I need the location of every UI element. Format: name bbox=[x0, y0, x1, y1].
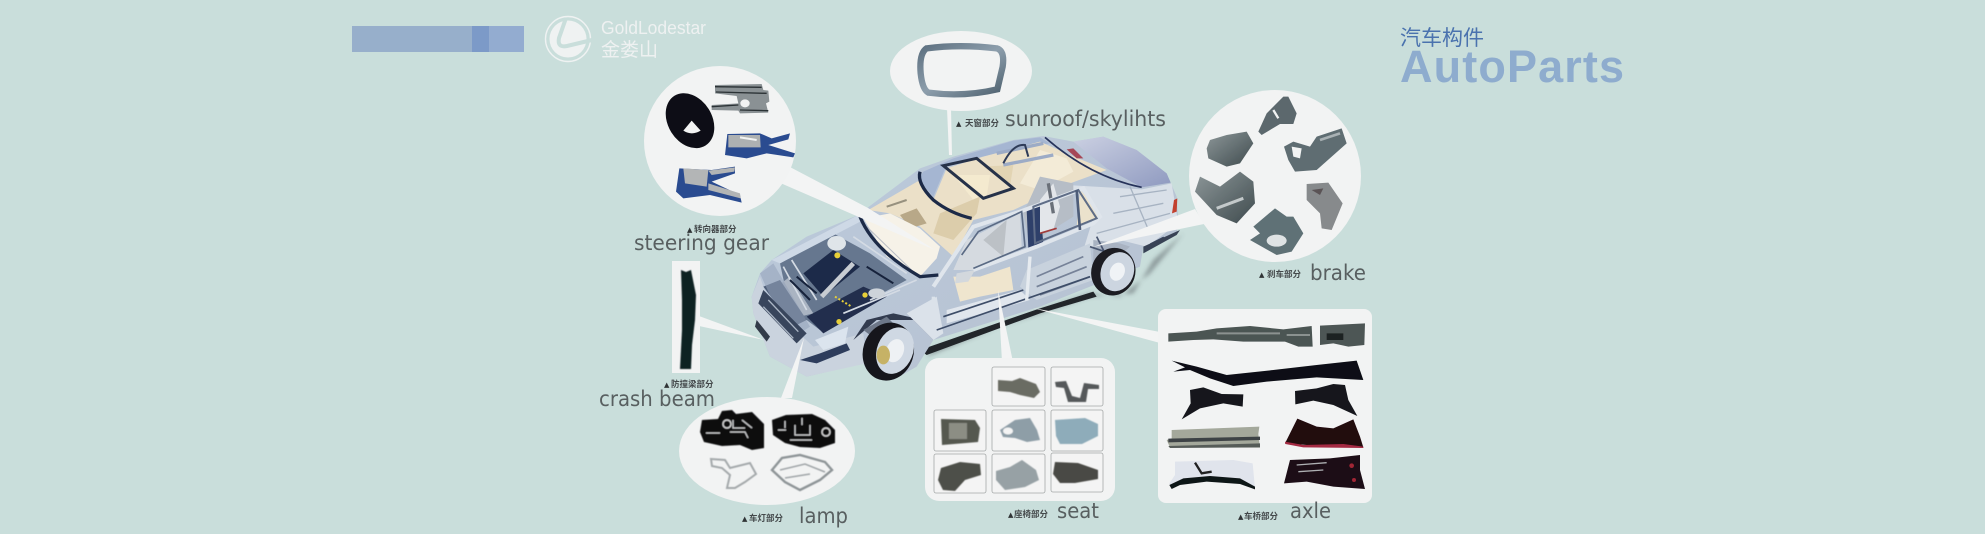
panel: axle bbox=[1158, 309, 1372, 503]
car illustration bbox=[752, 136, 1183, 387]
logo wordmark: GoldLodestar bbox=[601, 18, 706, 38]
axle part: left wing bbox=[1182, 387, 1243, 419]
label: crash beam: crash beam bbox=[599, 387, 715, 411]
pointer: steering gear bbox=[778, 166, 935, 250]
label: seat: seat bbox=[1057, 499, 1099, 523]
label: brake: brake bbox=[1310, 261, 1366, 285]
title bbox=[1400, 27, 1624, 92]
windshield frame bbox=[860, 217, 938, 277]
rear panel bbox=[1067, 183, 1178, 250]
left lower bracket bbox=[1195, 172, 1255, 223]
wheel arch & suspension bbox=[853, 313, 933, 340]
panel: seat bbox=[925, 358, 1115, 501]
windshield bbox=[863, 213, 940, 277]
label: seat bbox=[1008, 499, 1099, 523]
label: sunroof: 天窗部分 bbox=[965, 118, 1000, 128]
bottom bracket bbox=[1250, 208, 1303, 255]
panel: brake bbox=[1189, 90, 1361, 262]
pointer: seat bbox=[998, 290, 1013, 362]
right upper bracket bbox=[1284, 128, 1347, 172]
panel: crash beam bbox=[672, 261, 700, 373]
title English: AutoParts bbox=[1400, 41, 1624, 92]
label: lamp: lamp bbox=[799, 504, 848, 528]
axle part: long rail grey bbox=[1168, 326, 1313, 347]
front bumper bbox=[752, 277, 867, 377]
top bracket bbox=[1258, 97, 1297, 135]
left upper bracket bbox=[1207, 132, 1253, 167]
front wheel bbox=[855, 316, 921, 387]
front seat bbox=[953, 267, 1013, 302]
pointer: sunroof bbox=[947, 108, 952, 155]
seat tiles bbox=[934, 367, 1103, 493]
logo Chinese name: 金娄山 bbox=[601, 39, 658, 61]
interior bbox=[868, 142, 1107, 257]
engine bay bbox=[780, 233, 907, 330]
lamp part 1 bbox=[700, 410, 764, 450]
black ring part bbox=[656, 84, 724, 157]
label: seat: ▲ bbox=[1008, 511, 1014, 519]
rear lower side bbox=[1143, 230, 1180, 253]
seat parts bbox=[938, 378, 1099, 491]
sunroof frame bbox=[943, 158, 1013, 198]
crash beam part bbox=[680, 270, 696, 369]
roof glass bbox=[918, 137, 1050, 197]
label: brake: ▲ bbox=[1259, 271, 1265, 279]
label: brake bbox=[1259, 261, 1366, 285]
label: seat: 座椅部分 bbox=[1014, 509, 1049, 519]
label: lamp: 车灯部分 bbox=[749, 513, 784, 523]
lamp part 2 bbox=[772, 414, 835, 448]
brake light bbox=[1067, 148, 1083, 158]
label: steering gear: 转向器部分 bbox=[694, 224, 737, 234]
axle part: dark maroon bbox=[1284, 455, 1365, 489]
label: lamp bbox=[742, 504, 848, 528]
right lower bracket bbox=[1307, 183, 1343, 230]
label: brake: 刹车部分 bbox=[1267, 269, 1302, 279]
label: axle: axle bbox=[1290, 499, 1331, 523]
hood frame bbox=[772, 215, 863, 263]
panel: steering gear bbox=[644, 66, 796, 216]
pointer: lamp bbox=[781, 338, 804, 398]
label: axle: ▲ bbox=[1238, 513, 1244, 521]
title Chinese: 汽车构件 bbox=[1400, 27, 1484, 50]
rear deck bbox=[1073, 137, 1171, 187]
sunroof frame part bbox=[920, 46, 1003, 94]
car shadow bbox=[927, 233, 1183, 357]
label: axle: 车桥部分 bbox=[1244, 511, 1279, 521]
lamp part 3 bbox=[711, 459, 756, 488]
yellow caps bbox=[834, 252, 840, 258]
rear window line bbox=[1045, 137, 1142, 187]
pointer: axle bbox=[1033, 308, 1160, 343]
axle part: long black rail bbox=[1172, 361, 1363, 386]
bottom fork part bbox=[676, 167, 742, 203]
axle part: small plate bbox=[1320, 323, 1365, 347]
axle part: rail silver bbox=[1167, 427, 1260, 448]
frame strokes bbox=[933, 188, 1100, 287]
label: steering gear: steering gear bbox=[634, 231, 769, 255]
rear wheel bbox=[1085, 242, 1142, 301]
car body bbox=[752, 136, 1178, 380]
top bracket bbox=[712, 84, 769, 113]
axle part: white panel bbox=[1169, 460, 1255, 488]
label: lamp: ▲ bbox=[742, 515, 748, 523]
label: crash beam: 防撞梁部分 bbox=[671, 379, 714, 389]
logo: Gold Lodestar bbox=[546, 16, 706, 62]
label: sunroof: ▲ bbox=[956, 120, 962, 128]
axle part: dark red bbox=[1285, 419, 1363, 447]
fork part bbox=[725, 133, 795, 158]
label: crash beam: ▲ bbox=[664, 381, 670, 389]
pointer: crash beam bbox=[699, 316, 764, 340]
lamp part 4 bbox=[772, 455, 832, 490]
label: steering gear: ▲ bbox=[687, 226, 693, 234]
panel: lamp bbox=[679, 397, 855, 505]
side glass and door area bbox=[953, 213, 1022, 270]
pointer: brake bbox=[1093, 209, 1204, 247]
panel: sunroof bbox=[890, 31, 1032, 111]
axle part: right wing bbox=[1295, 384, 1357, 416]
header band bbox=[352, 26, 524, 52]
rear seat & mechanicals bbox=[1023, 177, 1073, 247]
label: sunroof: sunroof/skylihts bbox=[1005, 107, 1166, 131]
intake pipe bbox=[822, 263, 853, 297]
logo emblem bbox=[546, 16, 592, 62]
label: axle bbox=[1238, 499, 1331, 523]
